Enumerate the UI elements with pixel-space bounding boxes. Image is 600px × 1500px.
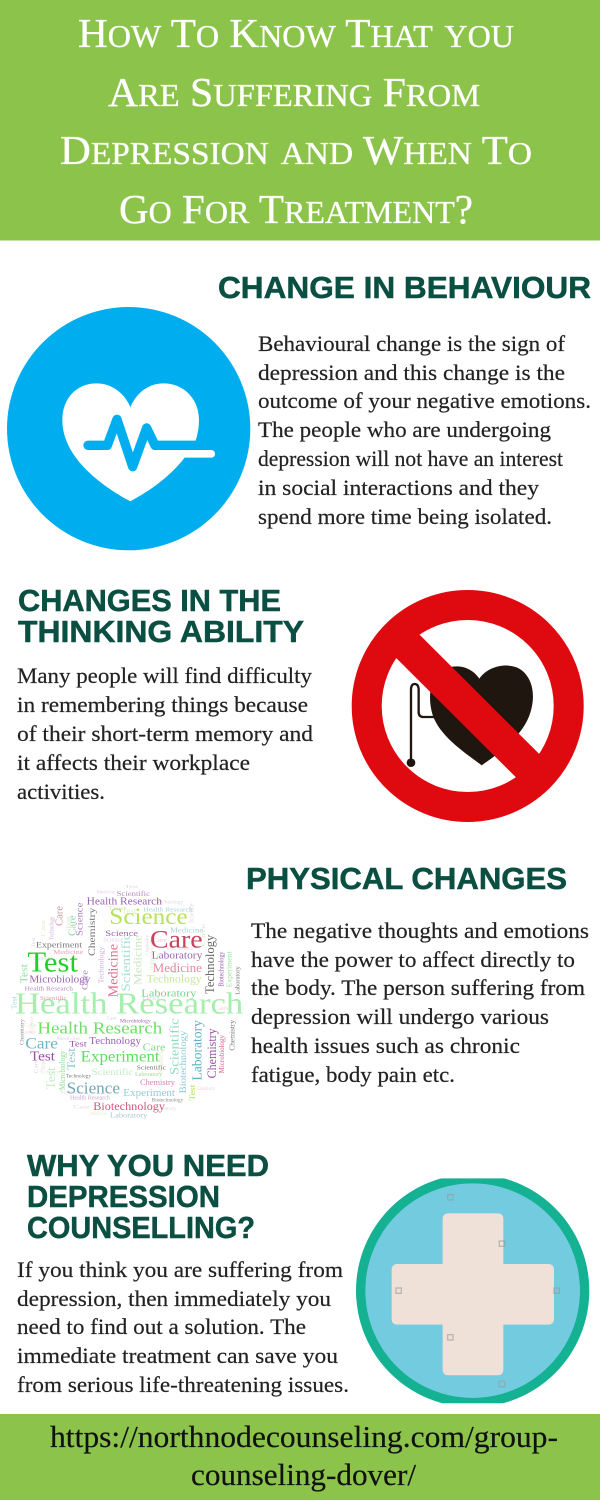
text block: behaviour: spend more time being isolated.	[258, 504, 552, 529]
word cloud circle: Care	[107, 1015, 117, 1022]
title: How To Know That you	[78, 6, 514, 57]
word cloud circle: Medicine	[133, 935, 145, 985]
word cloud circle: Biotechnology	[179, 1030, 189, 1093]
word cloud circle: Science	[67, 1078, 120, 1097]
word cloud circle	[10, 884, 243, 1120]
word cloud circle: Care	[150, 925, 203, 953]
icon: heart with pulse line	[7, 307, 250, 550]
word cloud circle: Test	[69, 1040, 88, 1049]
word cloud circle: Medicine	[170, 926, 203, 935]
word cloud circle: Test	[125, 884, 140, 889]
word cloud circle: Microbiology	[120, 1020, 151, 1025]
word cloud circle: Care	[201, 923, 207, 947]
word cloud circle: Chemistry	[228, 1020, 237, 1051]
word cloud circle: Scientific	[117, 889, 151, 898]
title	[60, 6, 532, 233]
word cloud circle: Scientific	[168, 1018, 182, 1075]
heading: changes in the thinking ability	[18, 583, 304, 649]
text block: behaviour: in social interactions and they	[258, 475, 540, 500]
icon: medical cross in circle	[356, 1174, 589, 1407]
word cloud circle: Test	[32, 937, 37, 947]
text block: physical: The negative thoughts and emotions	[251, 918, 589, 943]
footer banner	[0, 1414, 600, 1500]
footer url	[50, 1419, 558, 1492]
word cloud circle: Chemistry	[205, 1028, 219, 1078]
word cloud circle: Science	[156, 1050, 165, 1073]
text block: thinking: it affects their workplace	[17, 750, 250, 775]
text block: behaviour	[258, 331, 591, 529]
text block: physical: the body. The person suffering from	[251, 975, 586, 1000]
text block: behaviour: depression will not have an interest	[258, 446, 564, 471]
word cloud circle: Experiment	[81, 1049, 160, 1066]
word cloud circle: Technology	[203, 934, 217, 994]
word cloud circle: Test	[10, 996, 19, 1009]
word cloud circle: Technology	[157, 900, 184, 905]
word cloud circle: Care	[55, 906, 66, 926]
word cloud circle: Microbiology	[29, 975, 91, 986]
word cloud circle: Biotechnology	[216, 951, 225, 987]
word cloud circle: Technology	[147, 972, 202, 986]
word cloud circle: Care	[23, 1023, 37, 1029]
word cloud circle: Health Research	[87, 897, 163, 908]
word cloud circle: Technology	[49, 917, 55, 940]
word cloud circle: Health Research	[143, 907, 193, 914]
text block: counselling: If you think you are suffering from	[17, 1257, 344, 1282]
word cloud circle: Laboratory	[135, 1072, 162, 1078]
word cloud circle: Care	[33, 1059, 39, 1073]
text block: counselling: immediate treatment can save you	[17, 1343, 338, 1368]
word cloud circle: Scientific	[119, 933, 133, 992]
text block: physical	[251, 918, 589, 1087]
word cloud circle: Microbiology	[57, 1050, 67, 1090]
heading: why you need depression counselling: COUNSELLING?	[27, 1210, 255, 1245]
heading: change in behaviour: CHANGE IN BEHAVIOUR	[218, 270, 591, 305]
word cloud circle: Test	[187, 1084, 197, 1101]
word cloud circle: Care	[41, 919, 47, 937]
word cloud circle: Science	[29, 1016, 35, 1033]
word cloud circle: Test	[30, 1050, 55, 1065]
word cloud circle: Science	[20, 1029, 37, 1035]
word cloud circle: Care	[79, 970, 89, 990]
word cloud circle: Medicine	[105, 944, 120, 997]
word cloud circle: Microbiology	[217, 1035, 226, 1073]
word cloud circle: Science	[105, 928, 138, 938]
text block: thinking: activities.	[17, 779, 105, 804]
word cloud circle: Laboratory	[110, 1111, 148, 1120]
word cloud circle: Health Research	[167, 947, 194, 952]
text block: behaviour: The people who are undergoing	[258, 417, 551, 442]
word cloud circle: Experiment	[36, 940, 83, 949]
word cloud circle: Care	[25, 1035, 58, 1052]
word cloud circle: Laboratory	[152, 951, 203, 962]
word cloud circle: Chemistry	[33, 956, 54, 962]
title: Are Suffering From	[108, 65, 480, 116]
panel: changes in the thinking ability	[17, 583, 569, 807]
word cloud circle: Test	[64, 1047, 78, 1070]
heading: physical changes: PHYSICAL CHANGES	[246, 861, 567, 896]
word cloud circle: Health Research	[25, 986, 74, 993]
text block: physical: depression will undergo various	[251, 1004, 549, 1029]
word cloud circle: Test	[122, 906, 137, 915]
word cloud circle: Science	[40, 1069, 61, 1075]
word cloud circle: Care	[213, 1003, 230, 1012]
word cloud circle: Test	[173, 961, 179, 975]
panel: change in behaviour	[7, 270, 591, 550]
word cloud circle: Chemistry	[19, 1019, 25, 1045]
title: Go For Treatment?	[119, 182, 473, 233]
word cloud circle: Scientific	[92, 1067, 133, 1078]
text block: counselling: need to find out a solution. The	[17, 1314, 306, 1339]
word cloud circle: Care	[143, 1043, 166, 1054]
text block: thinking	[17, 663, 313, 804]
word cloud circle: Science	[76, 903, 86, 936]
word cloud circle: Scientific	[40, 995, 67, 1002]
word cloud circle: Test	[140, 996, 161, 1002]
word cloud circle: Technology	[96, 946, 105, 983]
word cloud circle: Chemistry	[144, 935, 150, 955]
word cloud circle: Technology	[89, 1036, 141, 1047]
panel: physical changes	[10, 861, 589, 1120]
word cloud circle: Laboratory	[190, 1020, 205, 1081]
word cloud circle: Chemistry	[140, 1078, 175, 1087]
text block: behaviour: depression and this change is the	[258, 360, 565, 385]
word cloud circle: Science	[186, 903, 195, 923]
title: Depression and When To	[60, 123, 532, 174]
word cloud circle: Scientific	[137, 1064, 166, 1071]
word cloud circle: Chemistry	[88, 907, 98, 956]
word cloud circle: Test	[107, 905, 127, 912]
word cloud circle: Medicine	[153, 961, 202, 975]
word cloud circle: Test	[44, 1067, 58, 1089]
word cloud circle: Science	[41, 1053, 47, 1070]
text block: thinking: in remembering things because	[17, 692, 308, 717]
header banner	[0, 0, 600, 240]
heading: changes in the thinking ability: CHANGES IN THE	[18, 583, 281, 618]
text block: counselling: depression, then immediately you	[17, 1286, 331, 1311]
word cloud circle: Laboratory	[141, 988, 197, 1000]
word cloud circle: Biotechnology	[149, 940, 155, 970]
text block: behaviour: Behavioural change is the sign of	[258, 331, 566, 356]
word cloud circle: Care	[153, 939, 168, 944]
heading: changes in the thinking ability: THINKING ABILITY	[18, 614, 304, 649]
word cloud circle: Care	[73, 1104, 91, 1110]
word cloud circle: Laboratory	[235, 966, 241, 995]
word cloud circle: Experiment	[123, 1088, 175, 1099]
word cloud circle: Science	[103, 938, 124, 944]
word cloud circle: Biotechnology	[93, 1099, 165, 1113]
word cloud circle: Health Research	[15, 986, 243, 1020]
word cloud circle: Medicine	[90, 1112, 107, 1117]
text block: behaviour: outcome of your negative emotions.	[258, 388, 591, 413]
word cloud circle: Experiment	[224, 951, 233, 987]
word cloud circle: Biotechnology	[152, 1098, 184, 1104]
panel: why you need depression counselling	[17, 1148, 589, 1407]
text block: counselling	[17, 1257, 349, 1397]
text block: physical: have the power to affect directly to	[251, 947, 575, 972]
heading: why you need depression counselling: WHY YOU NEED	[27, 1148, 269, 1183]
heading: why you need depression counselling: DEPRESSION	[27, 1179, 220, 1214]
word cloud circle: Medicine	[97, 890, 115, 895]
text block: physical: health issues such as chronic	[251, 1033, 520, 1058]
word cloud circle: Science	[60, 1090, 80, 1095]
word cloud circle: Care	[67, 915, 78, 936]
word cloud circle: Chemistry	[197, 1087, 215, 1092]
text block: physical: fatigue, body pain etc.	[251, 1062, 455, 1087]
word cloud circle: Laboratory	[150, 1107, 178, 1112]
footer url: counseling-dover/	[191, 1457, 416, 1492]
heading: why you need depression counselling	[27, 1148, 269, 1245]
word cloud circle: Test	[19, 964, 30, 983]
word cloud circle: Medicine	[53, 949, 84, 956]
word cloud circle: Health Research	[70, 1095, 110, 1101]
word cloud circle: Test	[65, 916, 72, 930]
word cloud circle: Test	[27, 948, 78, 979]
text block: thinking: of their short-term memory and	[17, 721, 313, 746]
text block: thinking: Many people will find difficulty	[17, 663, 313, 688]
word cloud circle: Science	[109, 904, 188, 930]
word cloud circle: Technology	[66, 1074, 92, 1079]
footer url: https://northnodecounseling.com/group-	[50, 1419, 558, 1454]
word cloud circle: Medicine	[57, 1036, 81, 1042]
text block: counselling: from serious life-threatening issues.	[17, 1372, 349, 1397]
word cloud circle: Health Research	[37, 1018, 163, 1037]
icon: prohibited pacemaker heart sign	[367, 605, 569, 807]
